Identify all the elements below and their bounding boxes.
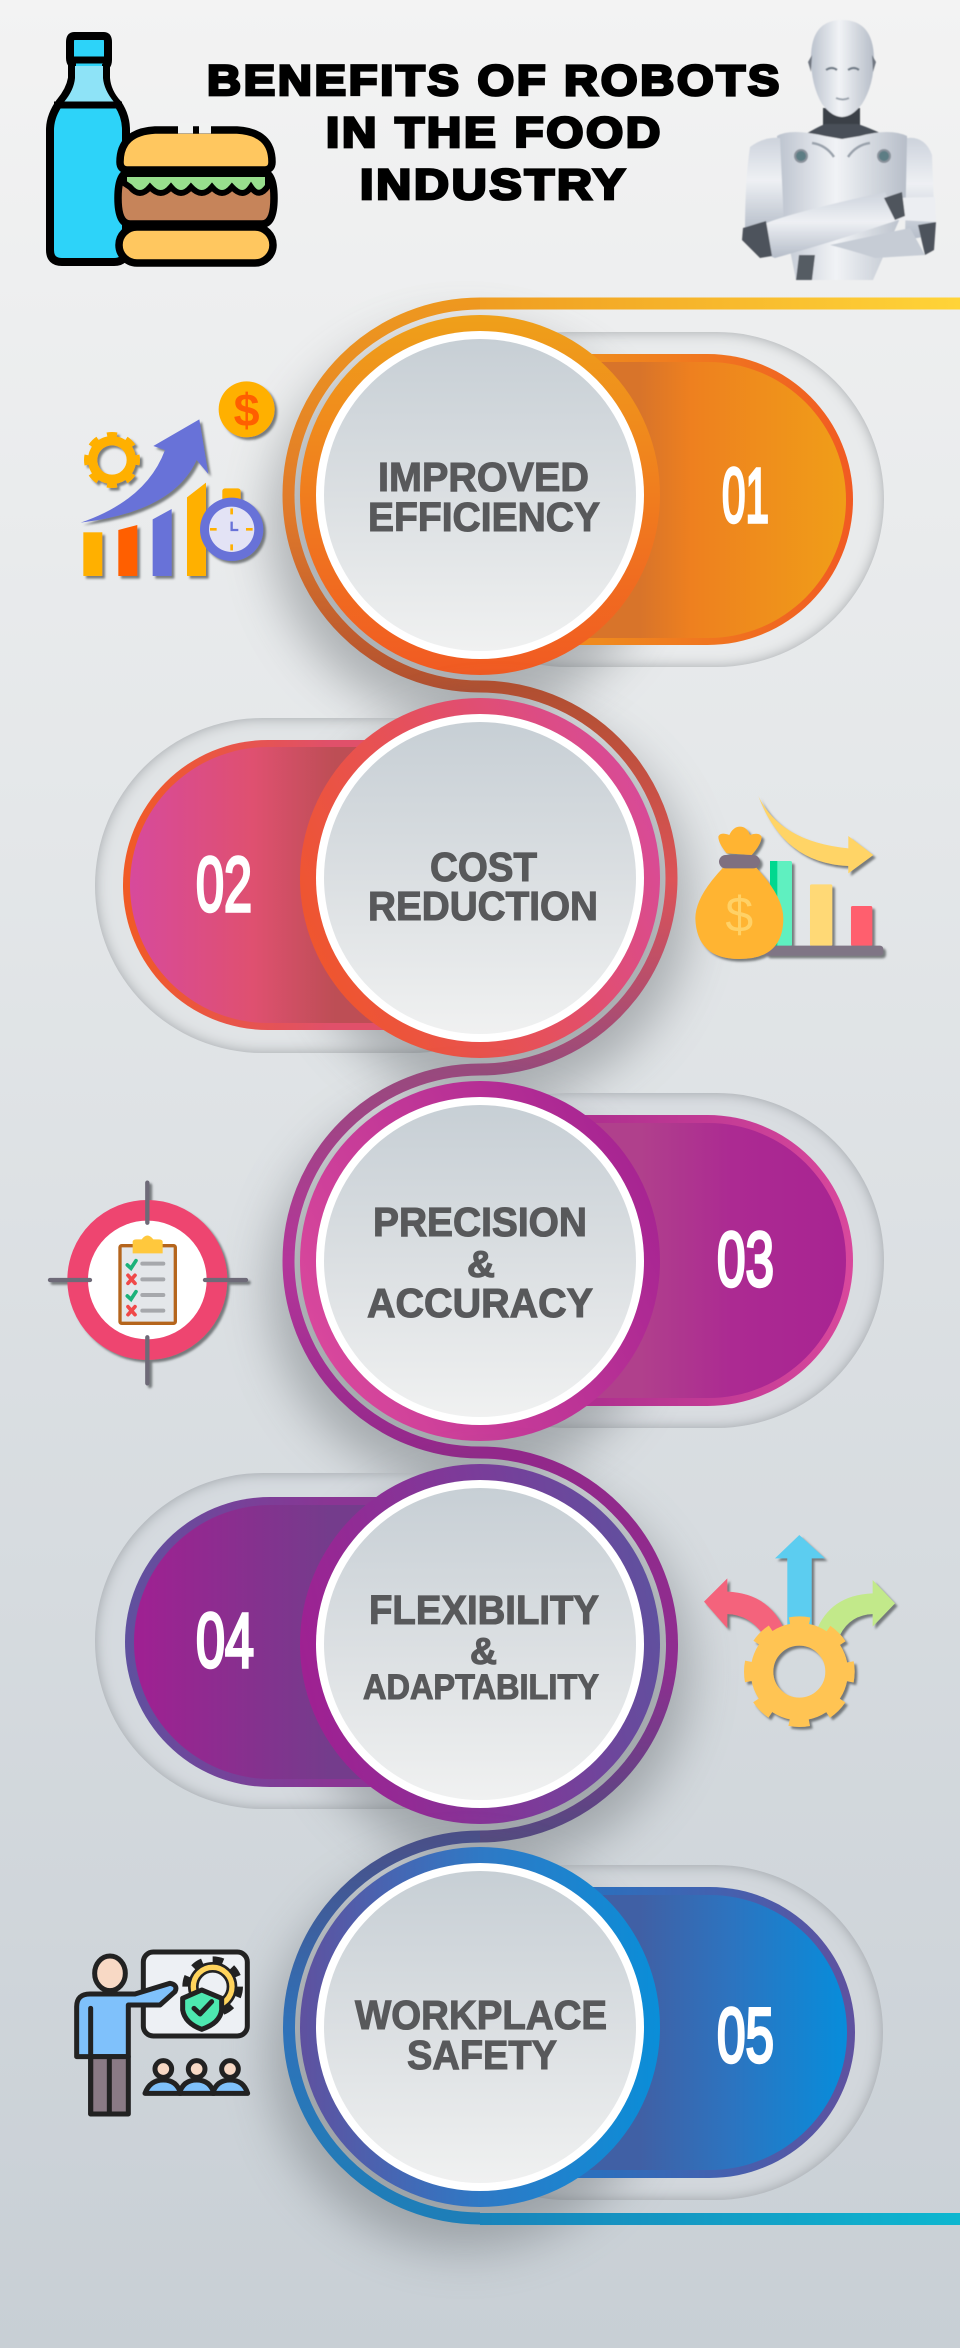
icon: burger [118,128,274,263]
label 5: SAFETY [407,2032,557,2078]
label 1: EFFICIENCY [368,494,600,540]
number pill 1 [400,354,853,645]
label 1 [368,454,600,540]
number 02: 02 [196,842,252,928]
panel: 01 improved efficiency [270,304,960,720]
icon: money bag with falling bars: $ [725,887,753,943]
ribbon: second arc [480,686,672,1070]
icon: bottle [50,36,126,262]
label 1: IMPROVED [378,454,589,500]
title: BENEFITS OF ROBOTS [207,57,782,105]
soft shadow 3 [270,1095,660,1485]
label 3 [367,1199,593,1326]
number 05: 05 [717,1993,774,2079]
label 2 [368,844,598,929]
label 2: REDUCTION [368,883,598,929]
number pill 2 [123,740,560,1030]
outer toggle track 4 [95,1473,579,1809]
circle 1 [300,315,660,675]
circle 3 [300,1081,660,1441]
soft shadow 2 [300,710,690,1100]
number pill 5 [400,1887,855,2178]
ribbon: third arc [288,1070,480,1452]
number pill 4 [125,1497,560,1787]
title: INDUSTRY [360,161,628,209]
circle 4 [300,1464,660,1824]
icon: robot with crossed arms [742,20,936,280]
label 5 [355,1992,607,2078]
panel: 05 workplace safety [270,1836,960,2250]
label 3: ACCURACY [367,1280,593,1326]
outer toggle track 3 [400,1093,884,1428]
circle 5 [300,1847,660,2207]
label 3: & [467,1244,495,1285]
icon: growth chart with gear, coin and stopwatch [81,381,275,576]
icon: money bag with falling bars [695,796,883,959]
circle 2 [300,698,660,1058]
number 03: 03 [717,1217,774,1303]
outer toggle track 2 [95,718,579,1053]
label 4: & [470,1631,497,1672]
icon: presenter showing safety shield [77,1952,248,2114]
label 4 [363,1587,599,1707]
label 5: WORKPLACE [355,1992,607,2038]
label 4: FLEXIBILITY [369,1587,599,1633]
label 4: ADAPTABILITY [363,1668,599,1707]
label 3: PRECISION [373,1199,587,1245]
soft shadow 5 [270,1860,660,2250]
number 01: 01 [722,453,769,539]
icon: target with checklist [50,1183,246,1383]
title [207,57,782,209]
ribbon: last arc and bottom bar [289,1836,960,2219]
number pill 3 [400,1115,853,1406]
outer toggle track 1 [400,332,884,667]
title: IN THE FOOD [326,109,663,157]
number 04: 04 [196,1598,254,1684]
soft shadow 4 [300,1475,690,1865]
header [50,20,936,280]
icon: gear with three arrows [704,1535,895,1722]
soft shadow 1 [270,330,660,720]
label 2: COST [430,844,537,890]
panel: 02 cost reduction [95,686,690,1100]
ribbon: top bar and first arc [288,304,960,686]
panel: 04 flexibility and adaptability [95,1452,690,1865]
outer toggle track 5 [400,1865,883,2200]
panel: 03 precision and accuracy [270,1070,884,1485]
icon: growth chart with gear, coin and stopwatch: $ [234,384,260,436]
ribbon: fourth arc [480,1452,672,1836]
